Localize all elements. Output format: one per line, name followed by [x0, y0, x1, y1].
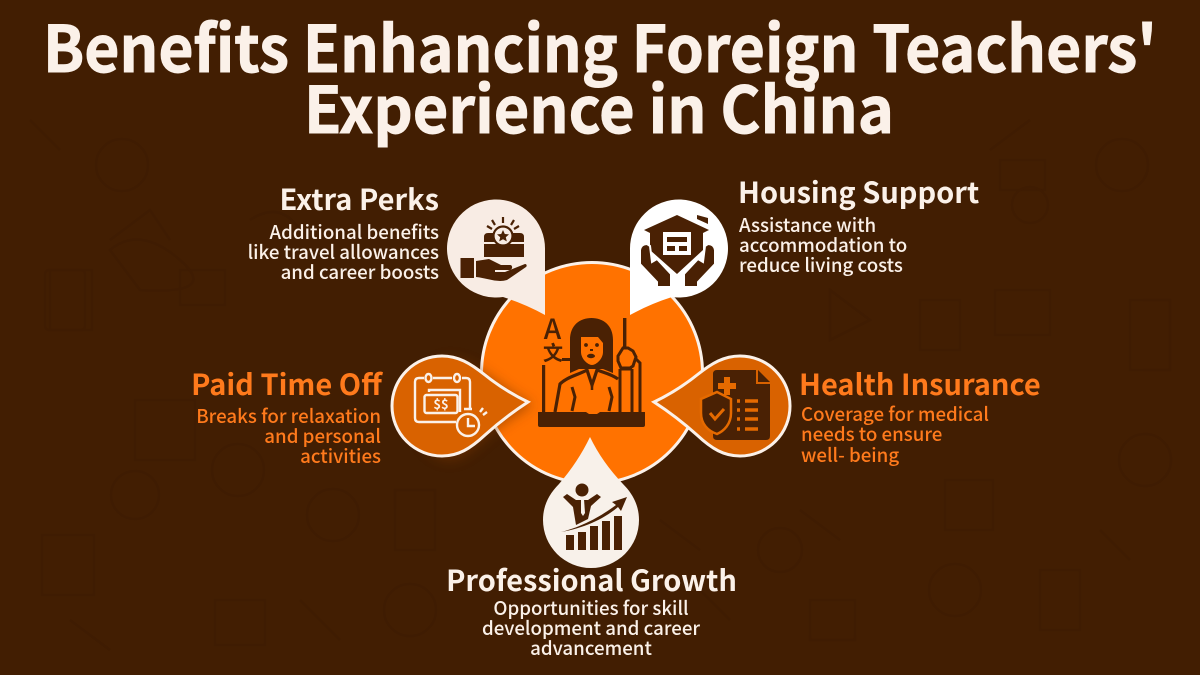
- drop: health insurance: [654, 356, 790, 456]
- drop: professional growth: [543, 437, 639, 568]
- text: paid time off: Breaks for relaxation: [196, 402, 381, 429]
- text: housing support: [739, 211, 907, 278]
- panel: extra perks: [248, 177, 545, 315]
- drop: housing support: [630, 200, 728, 315]
- drop: paid time off: [392, 356, 528, 456]
- text: extra perks: like travel allowances: [248, 238, 439, 265]
- title: [43, 0, 1157, 152]
- text: paid time off: and personal: [264, 422, 381, 449]
- central orange circle: [482, 262, 702, 484]
- text: paid time off: [196, 402, 381, 469]
- heading: professional growth: Professional Growth: [446, 558, 737, 600]
- text: health insurance: Coverage for medical: [801, 400, 989, 427]
- dollar signs: $$: [433, 394, 449, 413]
- title: Benefits Enhancing Foreign Teachers': [43, 0, 1157, 91]
- icon: insurance document and shield: [701, 370, 770, 440]
- heading: housing support: Housing Support: [738, 170, 979, 212]
- text: health insurance: well- being: [801, 441, 899, 468]
- panel: housing support: [630, 170, 979, 315]
- text: professional growth: [482, 594, 700, 661]
- panel: paid time off: [191, 356, 528, 469]
- panel: health insurance: [654, 356, 1041, 468]
- text: professional growth: development and career: [482, 614, 700, 641]
- icon: teacher: A: [544, 308, 562, 348]
- text: paid time off: activities: [300, 442, 381, 469]
- text: health insurance: needs to ensure: [801, 420, 942, 447]
- text: housing support: reduce living costs: [739, 251, 903, 278]
- icon: growth chart with person: [561, 484, 627, 550]
- heading: health insurance: Health Insurance: [799, 362, 1041, 404]
- text: professional growth: Opportunities for skill: [493, 594, 689, 621]
- text: housing support: Assistance with: [739, 211, 876, 238]
- text: extra perks: Additional benefits: [269, 218, 439, 245]
- panel: professional growth: [446, 437, 737, 661]
- text: professional growth: advancement: [530, 634, 652, 661]
- icon: teacher: [538, 308, 645, 427]
- icon: gift card on hand: [460, 217, 527, 281]
- icon: house in hands: [640, 215, 715, 287]
- heading: paid time off: Paid Time Off: [191, 362, 383, 404]
- title: Experience in China: [304, 60, 894, 152]
- text: extra perks: [248, 218, 439, 285]
- heading: extra perks: Extra Perks: [279, 177, 439, 219]
- drop: extra perks: [447, 200, 545, 315]
- text: health insurance: [801, 400, 989, 468]
- text: housing support: accommodation to: [739, 231, 907, 258]
- icon: teacher: 文: [543, 337, 563, 366]
- icon: calendar money stopwatch: [415, 374, 487, 436]
- shadow under paid time off drop: [416, 359, 533, 460]
- text: extra perks: and career boosts: [281, 258, 439, 285]
